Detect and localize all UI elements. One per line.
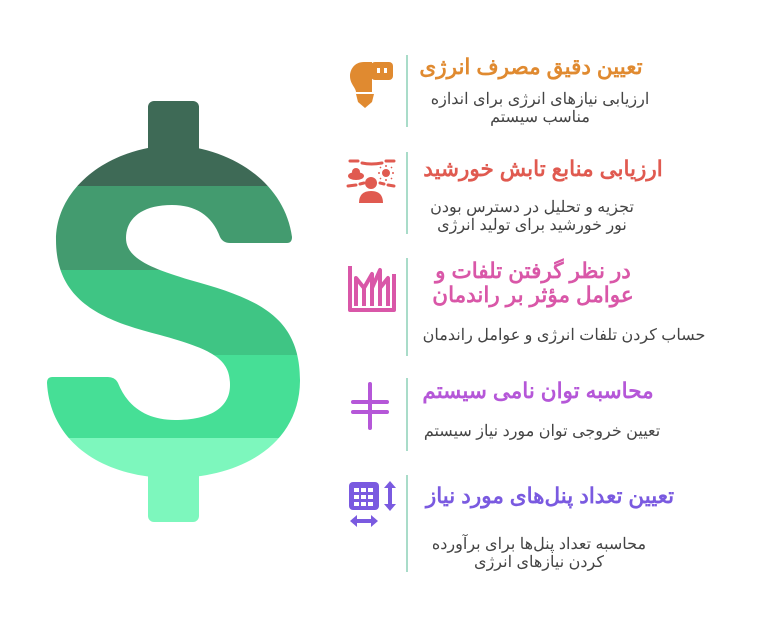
title: در نظر گرفتن تلفات و xyxy=(435,259,631,283)
icon: panel grid with arrows xyxy=(349,481,396,527)
description xyxy=(430,199,634,234)
description: محاسبه تعداد پنل‌ها برای برآورده xyxy=(432,536,646,553)
icon: losses chart xyxy=(348,266,396,312)
title: تعیین تعداد پنل‌های مورد نیاز xyxy=(426,484,674,508)
step 1 xyxy=(350,55,649,127)
description: تجزیه و تحلیل در دسترس بودن xyxy=(430,199,634,216)
step 5 xyxy=(349,475,674,572)
title: عوامل مؤثر بر راندمان xyxy=(432,283,634,307)
step 3 xyxy=(348,258,705,356)
line xyxy=(406,378,408,451)
description: کردن نیازهای انرژی xyxy=(474,554,604,571)
description xyxy=(431,91,649,126)
description: ارزیابی نیازهای انرژی برای اندازه xyxy=(431,91,649,108)
icon: solar radiation xyxy=(346,160,396,203)
description: تعیین خروجی توان مورد نیاز سیستم xyxy=(424,423,660,440)
title: ارزیابی منابع تابش خورشید xyxy=(423,157,663,181)
title: محاسبه توان نامی سیستم xyxy=(422,379,654,403)
step 4 xyxy=(351,378,660,451)
description: مناسب سیستم xyxy=(490,109,590,126)
description: نور خورشید برای تولید انرژی xyxy=(437,217,627,234)
step 2 xyxy=(346,152,663,234)
dollar sign graphic xyxy=(47,101,300,522)
description: حساب کردن تلفات انرژی و عوامل راندمان xyxy=(423,327,705,344)
title: تعیین دقیق مصرف انرژی xyxy=(419,55,643,79)
title xyxy=(432,258,634,308)
line xyxy=(406,475,408,572)
line xyxy=(406,258,408,356)
line xyxy=(406,152,408,234)
line xyxy=(406,55,408,127)
icon: bulb with robot xyxy=(350,62,393,108)
icon: capacitor symbol xyxy=(351,382,389,430)
description xyxy=(432,534,646,571)
